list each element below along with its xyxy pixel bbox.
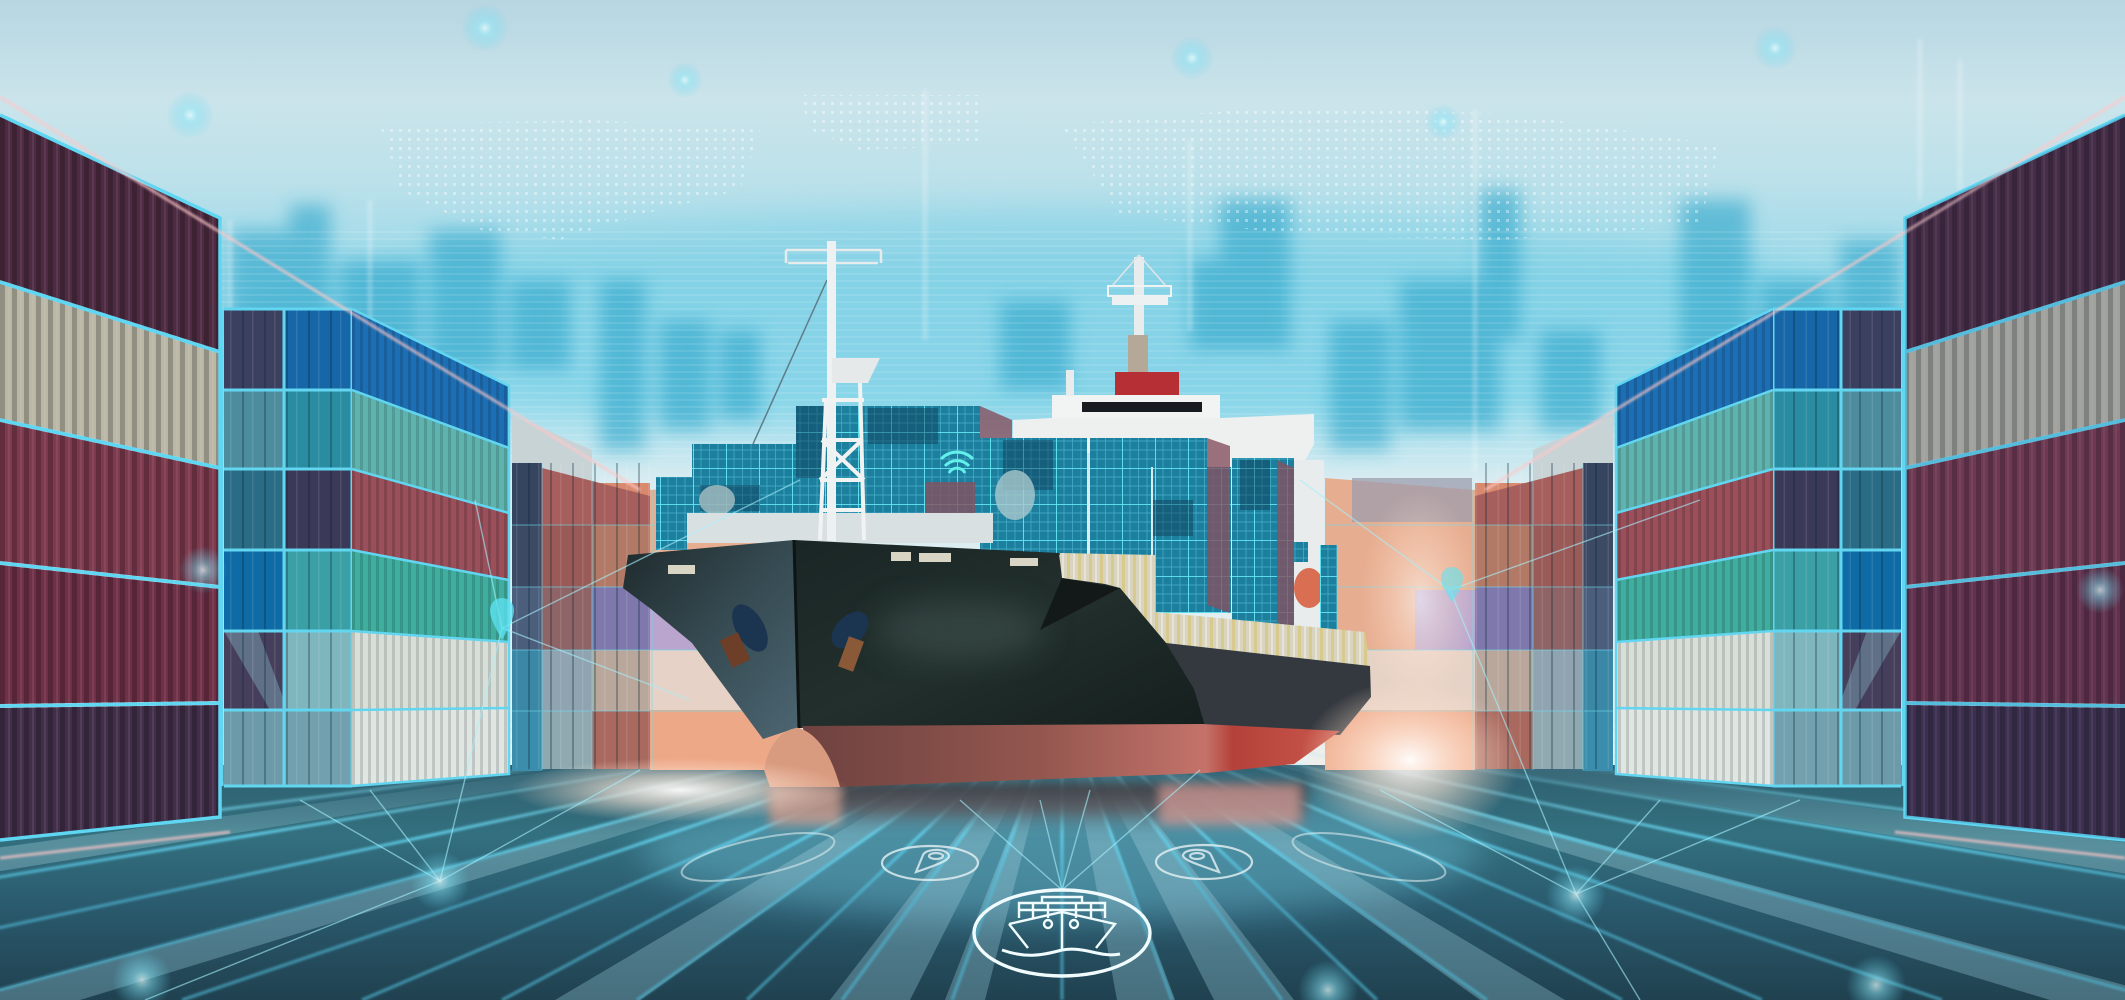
bulbous bow	[764, 728, 840, 787]
water reflection of ship	[767, 782, 1307, 832]
ground with light grid	[0, 700, 2125, 1000]
wide light beams on floor	[0, 700, 2125, 1000]
anchor left	[720, 598, 775, 668]
wifi symbol	[941, 452, 973, 473]
dotted world map	[380, 95, 1720, 240]
stem line	[794, 540, 799, 728]
container stacks: right side	[1325, 97, 2125, 858]
aft superstructure and radar mast	[1013, 255, 1324, 635]
network connection lines	[145, 480, 1800, 1000]
central floor glow	[642, 780, 1482, 920]
hull stern side	[1120, 588, 1371, 735]
floor icon: ship emblem	[974, 890, 1150, 976]
right front stack colour tint	[1905, 115, 2125, 840]
container stacks: left side	[0, 97, 800, 858]
hull highlight patch	[875, 600, 1045, 660]
mauve box behind stern	[1352, 478, 1472, 522]
foremast	[753, 241, 881, 541]
middle stack door faces	[222, 309, 352, 786]
light flares	[510, 490, 1520, 840]
container ship	[623, 241, 1371, 787]
deck name plates	[668, 552, 1038, 574]
hull bow side	[623, 540, 799, 739]
floor icon: right location pin	[1156, 845, 1252, 879]
maroon side faces	[925, 406, 1294, 632]
laser light lines	[0, 97, 640, 858]
front stack	[0, 115, 220, 840]
digital container stacks on deck	[656, 406, 1337, 636]
middle stack side faces	[352, 309, 509, 786]
rear stack	[512, 415, 800, 771]
side railing	[1060, 553, 1370, 668]
darker container tints	[700, 406, 1270, 536]
radiating cyan lines	[0, 700, 2125, 1000]
floor icon: left location pin	[882, 846, 978, 880]
location pin marker right	[1441, 567, 1463, 602]
floor icon: far-right tag ring	[1289, 823, 1449, 891]
blurred digital city skyline	[220, 40, 1960, 470]
location pin marker left	[490, 598, 514, 640]
floor icon: far-left tag ring	[678, 823, 838, 891]
fore deck house	[687, 513, 993, 543]
anchor right	[825, 605, 875, 672]
red boot topping	[802, 724, 1340, 787]
pale dome reflections	[699, 485, 735, 515]
hull main flank	[794, 540, 1205, 728]
